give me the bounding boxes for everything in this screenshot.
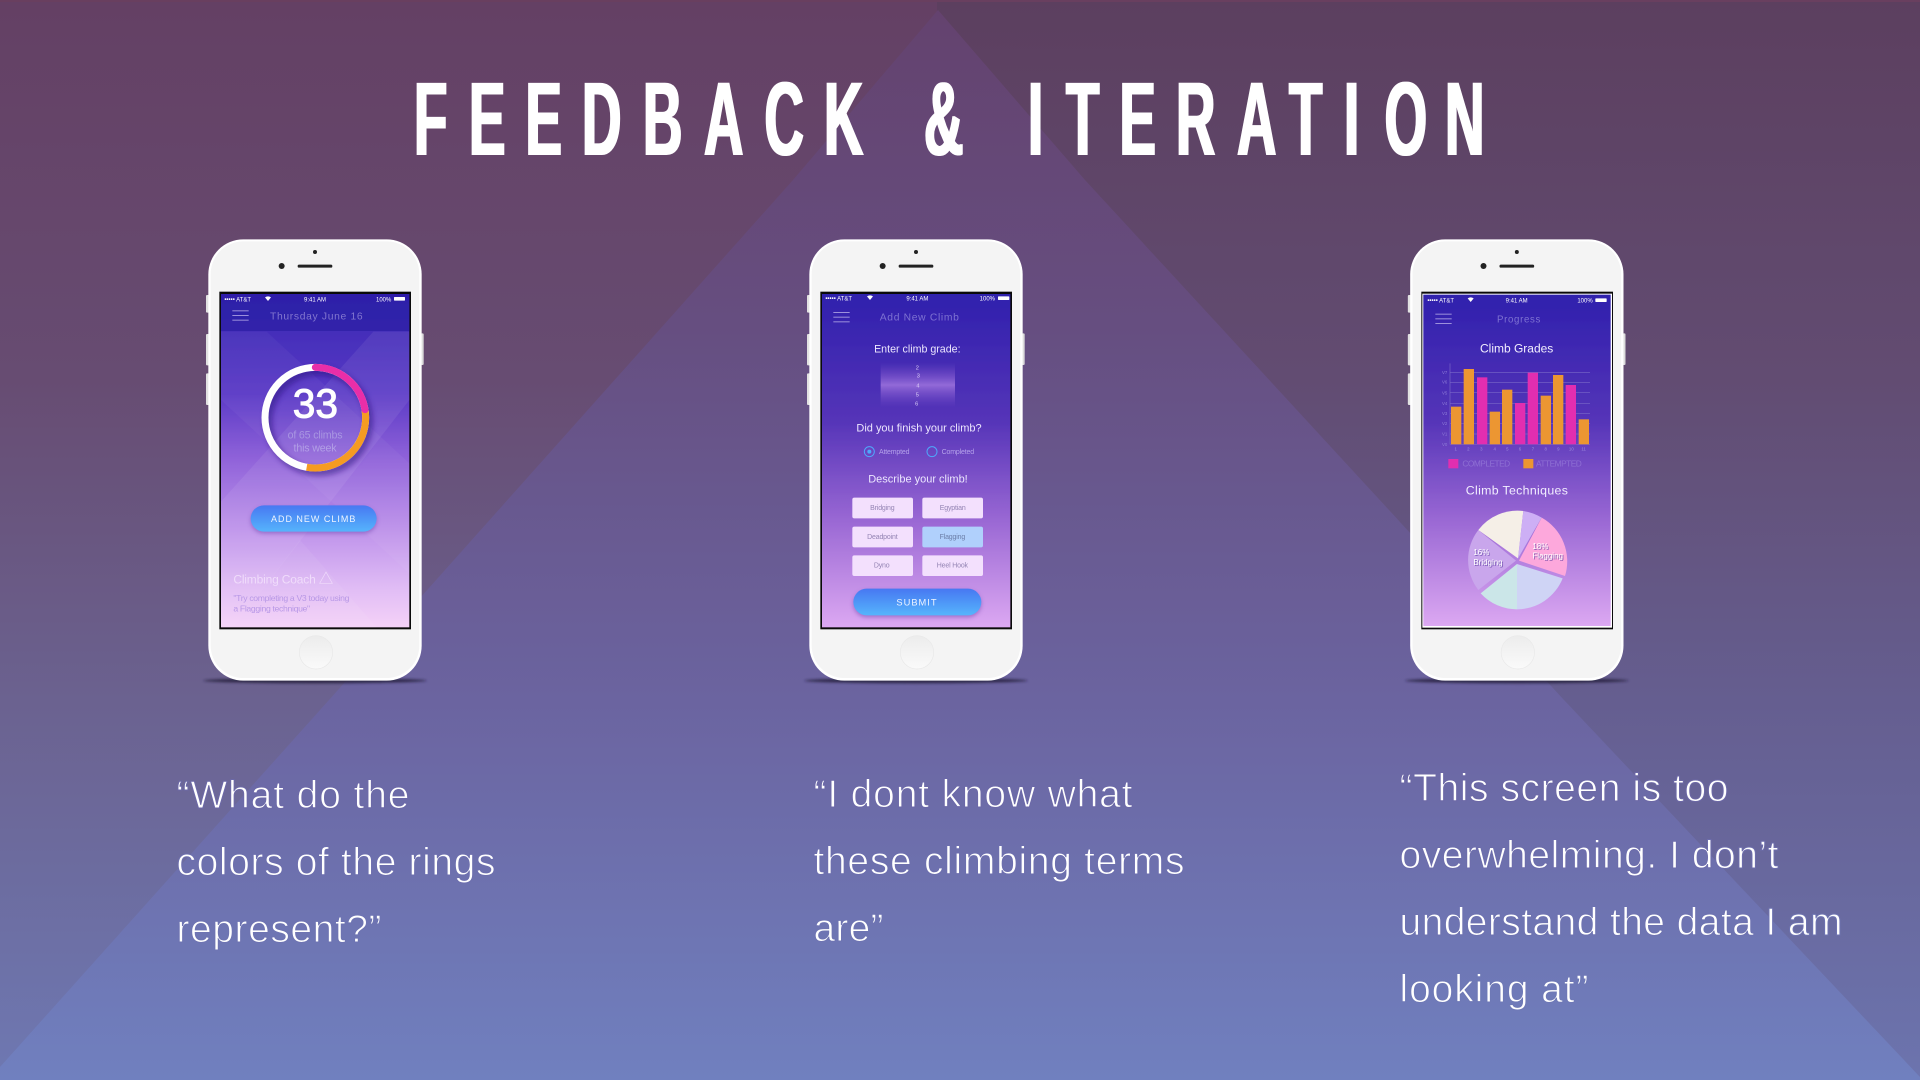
technique buttons: Flagging: [940, 534, 965, 541]
pie chart: 18%: [1532, 542, 1548, 551]
technique buttons: Bridging: [870, 505, 895, 512]
quote 3: looking at”: [1400, 968, 1588, 1011]
quote 2: [814, 773, 1184, 950]
ring value: 33: [293, 380, 338, 426]
status bar: ••••• AT&T: [825, 297, 852, 303]
quote 1: represent?”: [176, 908, 382, 951]
status bar: ••••• AT&T: [224, 297, 251, 303]
screen: [221, 294, 409, 627]
status bar: 100%: [376, 297, 392, 303]
radio options: Attempted: [879, 449, 910, 456]
bar chart: 2: [1467, 446, 1470, 451]
technique buttons: Dyno: [874, 563, 890, 570]
grade picker: 5: [916, 392, 919, 398]
quote 3: [1400, 767, 1842, 1011]
quote 1: “What do the: [176, 774, 410, 817]
status bar: 100%: [980, 297, 996, 303]
grade heading: Enter climb grade:: [874, 343, 961, 355]
bar chart: 6: [1519, 446, 1522, 451]
pie chart: Bridging: [1473, 558, 1503, 567]
bar chart: V1: [1442, 432, 1448, 437]
pie chart: [1468, 511, 1567, 609]
screen: [822, 294, 1010, 627]
hamburger menu icon: [232, 310, 249, 321]
bar chart: 9: [1557, 446, 1560, 451]
bar chart: 7: [1532, 446, 1535, 451]
pie chart: Flagging: [1533, 552, 1564, 561]
grade picker: 3: [917, 374, 920, 380]
status bar: 100%: [1577, 299, 1593, 305]
status bar: 9:41 AM: [906, 297, 928, 303]
ring value: [288, 380, 342, 454]
status bar: [224, 296, 405, 303]
bar chart: V4: [1442, 401, 1448, 406]
pie chart heading: Climb Techniques: [1466, 484, 1568, 498]
hamburger menu icon: [833, 312, 850, 322]
phone body: [804, 239, 1028, 683]
add new climb button: ADD NEW CLIMB: [271, 514, 356, 524]
screen title: Add New Climb: [880, 313, 960, 324]
pie chart: 18%: [1533, 543, 1549, 552]
screen title: Thursday June 16: [270, 312, 363, 323]
finish question: Did you finish your climb?: [856, 422, 982, 434]
quote 1: colors of the rings: [176, 841, 496, 884]
status bar: [1427, 297, 1607, 305]
submit button: SUBMIT: [896, 597, 938, 607]
bar chart: 5: [1506, 446, 1509, 451]
quote 3: “This screen is too: [1400, 767, 1728, 810]
quote 1: [176, 774, 496, 951]
pie chart: Flagging: [1532, 551, 1563, 560]
technique buttons: [852, 498, 983, 576]
ring value: this week: [294, 442, 337, 454]
phone 2: add new climb screen: [804, 239, 1028, 683]
quote 3: overwhelming. I don’t: [1400, 834, 1779, 877]
progress ring: [265, 367, 369, 472]
chart legend: ATTEMPTED: [1536, 459, 1582, 469]
technique buttons: Egyptian: [940, 505, 966, 512]
technique buttons: Deadpoint: [867, 534, 898, 541]
status bar: ••••• AT&T: [1427, 299, 1454, 305]
bar chart: 11: [1581, 446, 1587, 451]
describe heading: Describe your climb!: [868, 474, 968, 486]
grade picker: [881, 363, 955, 407]
hamburger menu icon: [1435, 314, 1452, 324]
grade picker: 4: [916, 383, 920, 389]
phone body: [203, 239, 427, 683]
status bar: [825, 295, 1009, 303]
quote 2: these climbing terms: [814, 840, 1184, 883]
screen title: Progress: [1497, 315, 1541, 326]
bar chart: 3: [1480, 446, 1483, 451]
grade picker: 6: [915, 401, 918, 407]
climbing coach: Climbing Coach: [233, 572, 316, 586]
submit button: [853, 589, 981, 617]
status bar: 9:41 AM: [304, 297, 326, 303]
quote 3: understand the data I am: [1400, 901, 1842, 944]
ring value: of 65 climbs: [288, 429, 342, 441]
bar chart: 10: [1569, 446, 1574, 451]
pie chart: Bridging: [1474, 559, 1504, 568]
phone 3: progress screen: [1405, 239, 1628, 683]
bar chart heading: Climb Grades: [1480, 342, 1553, 356]
radio options: Completed: [942, 449, 974, 456]
climbing coach: "Try completing a V3 today using: [233, 593, 350, 603]
phone 1: home screen: [203, 239, 427, 683]
screen: [1423, 295, 1611, 626]
title: FEEDBACK & ITERATION: [414, 60, 1484, 178]
status bar: 9:41 AM: [1506, 299, 1528, 305]
pie chart: 16%: [1474, 549, 1490, 558]
chart legend: COMPLETED: [1462, 459, 1510, 469]
bar chart: 4: [1493, 446, 1496, 451]
bar chart: 1: [1454, 446, 1457, 451]
quote 2: “I dont know what: [814, 773, 1133, 816]
bar chart: V7: [1442, 370, 1448, 375]
bar chart: V5: [1442, 390, 1448, 395]
quote 2: are”: [814, 907, 884, 950]
bar chart: V2: [1442, 421, 1448, 426]
bar chart: [1442, 363, 1590, 451]
pie chart: 16%: [1473, 548, 1489, 557]
bar chart: V3: [1442, 411, 1448, 416]
add new climb button: [251, 505, 377, 534]
bar chart: V0: [1442, 442, 1448, 447]
chart legend: [1448, 459, 1582, 469]
climbing coach: [233, 572, 350, 613]
bar chart: V6: [1442, 380, 1448, 385]
bar chart: 8: [1544, 446, 1547, 451]
technique buttons: Heel Hook: [937, 563, 969, 570]
phone body: [1405, 239, 1628, 683]
grade picker: 2: [916, 366, 919, 372]
radio options: [864, 447, 974, 457]
climbing coach: a Flagging technique": [233, 603, 310, 613]
